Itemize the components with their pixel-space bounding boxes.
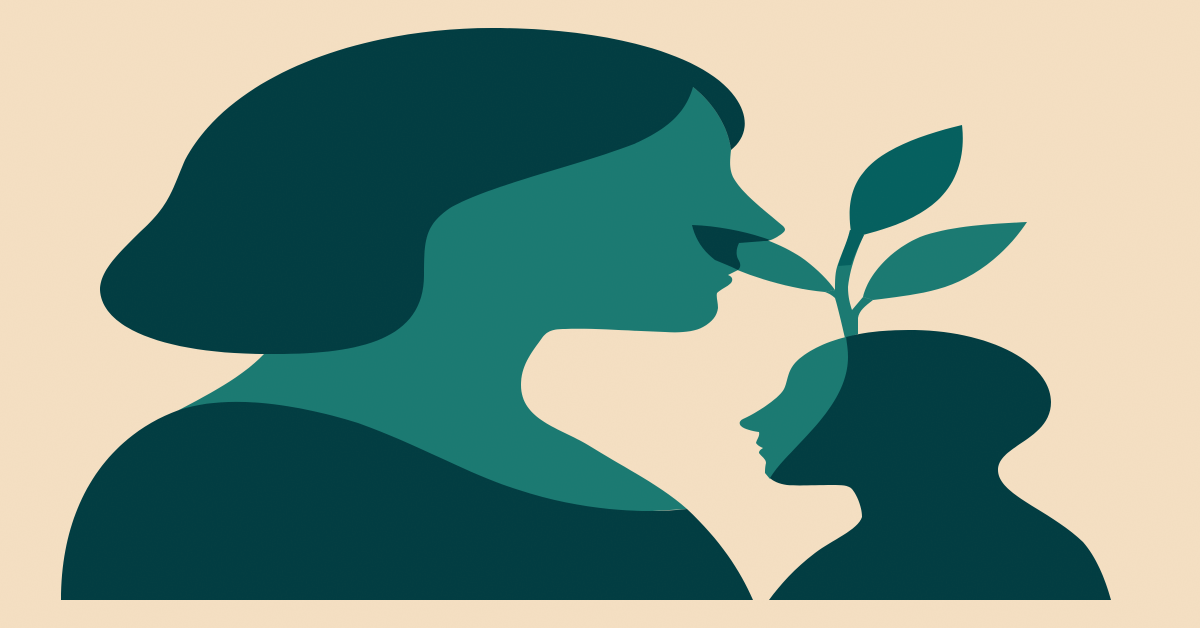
woman face and neck bbox=[179, 87, 785, 520]
figure: woman bbox=[61, 28, 785, 600]
leaf overlap on woman's face bbox=[692, 225, 770, 270]
left leaf bbox=[692, 225, 835, 292]
figure: child bbox=[740, 330, 1111, 600]
child face bbox=[740, 337, 850, 479]
woman hair bbox=[100, 28, 745, 354]
right leaf bbox=[863, 222, 1027, 300]
child head and body bbox=[769, 330, 1111, 600]
plant: sprout bbox=[692, 125, 1027, 338]
top leaf bbox=[850, 125, 963, 235]
stem bbox=[825, 230, 873, 338]
upper stem shading bbox=[838, 230, 864, 266]
woman shoulder bbox=[61, 402, 753, 600]
